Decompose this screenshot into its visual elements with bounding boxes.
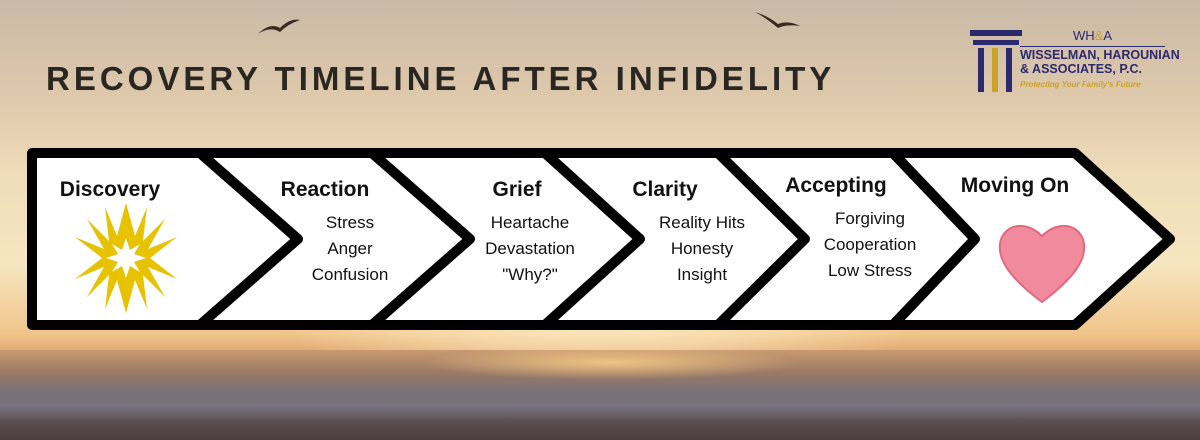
stage: Accepting: Cooperation	[824, 235, 916, 254]
logo: & ASSOCIATES, P.C.	[1020, 62, 1142, 76]
stage: Reaction	[281, 178, 388, 284]
stage: Accepting	[785, 174, 916, 280]
stage: Reaction: Stress	[326, 213, 374, 232]
stage: Accepting: Low Stress	[828, 261, 912, 280]
stage: Clarity	[632, 178, 745, 284]
birds	[258, 12, 800, 34]
sun reflection	[420, 345, 800, 380]
logo: WISSELMAN, HAROUNIAN	[1020, 48, 1180, 62]
stage: Grief: Heartache	[491, 213, 569, 232]
stage: Moving On: Moving On	[961, 174, 1069, 197]
stage: Clarity: Honesty	[671, 239, 733, 258]
stage: Grief: Devastation	[485, 239, 575, 258]
icon: sun	[75, 203, 177, 313]
stage: Accepting: Forgiving	[835, 209, 905, 228]
logo: Protecting Your Family's Future	[1020, 80, 1141, 89]
stage: Reaction: Anger	[327, 239, 373, 258]
icon: heart	[1000, 226, 1084, 302]
stage: Clarity: Insight	[677, 265, 727, 284]
logo	[970, 28, 1180, 92]
logo: WH&A	[1073, 28, 1112, 43]
stage: Grief: "Why?"	[502, 265, 558, 284]
stage: Discovery: Discovery	[60, 178, 160, 201]
sea	[0, 350, 1200, 440]
stage: Accepting: Accepting	[785, 174, 887, 197]
stage: Clarity: Clarity	[632, 178, 698, 201]
stage: Grief: Grief	[492, 178, 542, 201]
title: RECOVERY TIMELINE AFTER INFIDELITY	[46, 60, 835, 97]
stage: Reaction: Reaction	[281, 178, 369, 201]
stage: Grief	[485, 178, 575, 284]
stage: Clarity: Reality Hits	[659, 213, 745, 232]
stage: Reaction: Confusion	[312, 265, 388, 284]
